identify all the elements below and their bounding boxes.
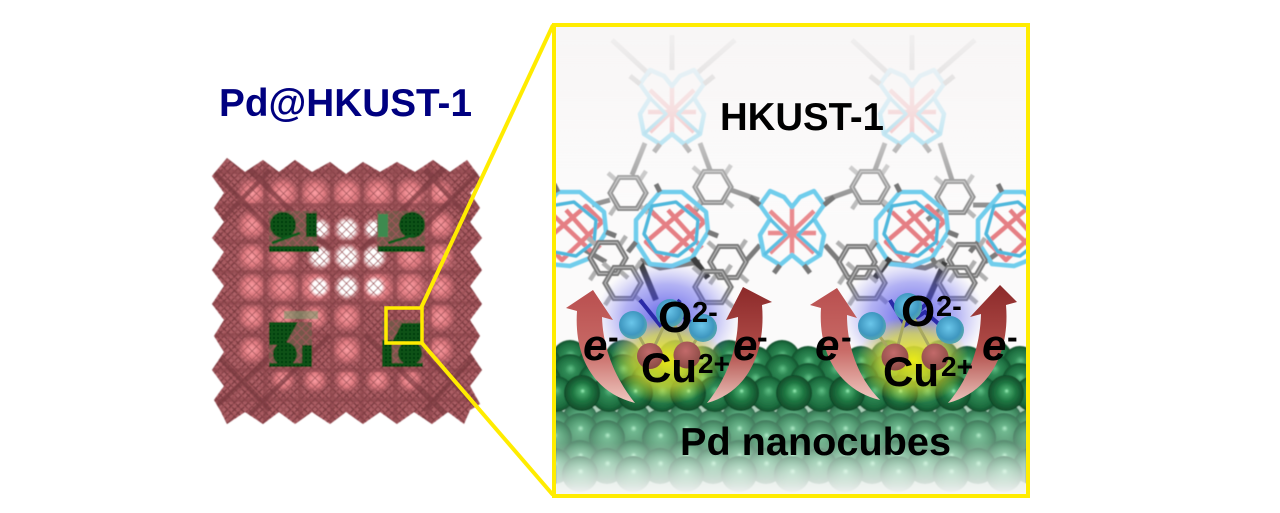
blue electron glow left — [602, 267, 735, 362]
arrow: electron flow 1 — [566, 290, 635, 403]
zoom connector lines — [421, 25, 553, 495]
label: e- 2 — [733, 319, 768, 370]
copper atoms — [637, 342, 948, 370]
label: e- 2: - — [757, 319, 768, 355]
label: Cu2+ left: Cu — [641, 344, 697, 391]
zoom selection square — [386, 308, 422, 343]
Pd nanocube: bottom left — [269, 311, 318, 367]
label: Cu2+ left: 2+ — [698, 348, 730, 379]
label: e- 3: - — [841, 319, 852, 355]
Pd nanocube: bottom right — [382, 320, 423, 367]
HKUST-1 molecular framework — [556, 35, 1026, 310]
label: O2- right — [901, 287, 962, 336]
label: e- 1: e — [583, 321, 607, 370]
panel frame — [554, 25, 1028, 496]
label: O2- left — [658, 293, 718, 342]
label: e- 3 — [815, 319, 852, 370]
Pd nanocube: top right — [377, 211, 425, 252]
yellow glow left — [611, 316, 723, 404]
label: e- 1: - — [608, 319, 619, 355]
label: HKUST-1: HKUST-1 — [720, 96, 884, 139]
label: Cu2+ left — [641, 344, 730, 391]
panel: Pd@HKUST-1 crystal lattice — [205, 150, 490, 430]
Pd nanocube atoms — [556, 339, 1026, 492]
dark linker bonds in glow — [640, 300, 940, 325]
pink pore blobs — [236, 176, 456, 393]
label: O2- left: O — [658, 293, 692, 342]
arrow: electron flow 3 — [810, 288, 880, 400]
Pd nanocube: top left — [269, 211, 319, 252]
arrow: electron flow 2 — [707, 287, 772, 403]
label: e- 4: - — [1007, 319, 1018, 355]
label: Cu2+ right — [883, 348, 973, 395]
arrow: electron flow 4 — [948, 285, 1017, 403]
label: e- 3: e — [815, 321, 839, 370]
panel: magnified interface — [552, 23, 1030, 498]
label: e- 4: e — [982, 321, 1006, 370]
blue electron glow right — [847, 264, 980, 358]
label: Cu2+ right: 2+ — [941, 351, 973, 382]
label: O2- left: 2- — [692, 297, 718, 329]
yellow glow right — [857, 316, 969, 404]
label: Cu2+ right: Cu — [883, 348, 939, 395]
label: O2- right: 2- — [936, 291, 962, 323]
oxygen and copper bond lines — [638, 318, 944, 347]
title: Pd@HKUST-1 — [219, 82, 472, 125]
label: e- 4 — [982, 319, 1018, 370]
label: Pd nanocubes: Pd nanocubes — [680, 421, 951, 464]
label: O2- right: O — [901, 287, 935, 336]
oxygen atoms — [619, 293, 964, 344]
label: e- 1 — [583, 319, 619, 370]
label: e- 2: e — [733, 321, 757, 370]
